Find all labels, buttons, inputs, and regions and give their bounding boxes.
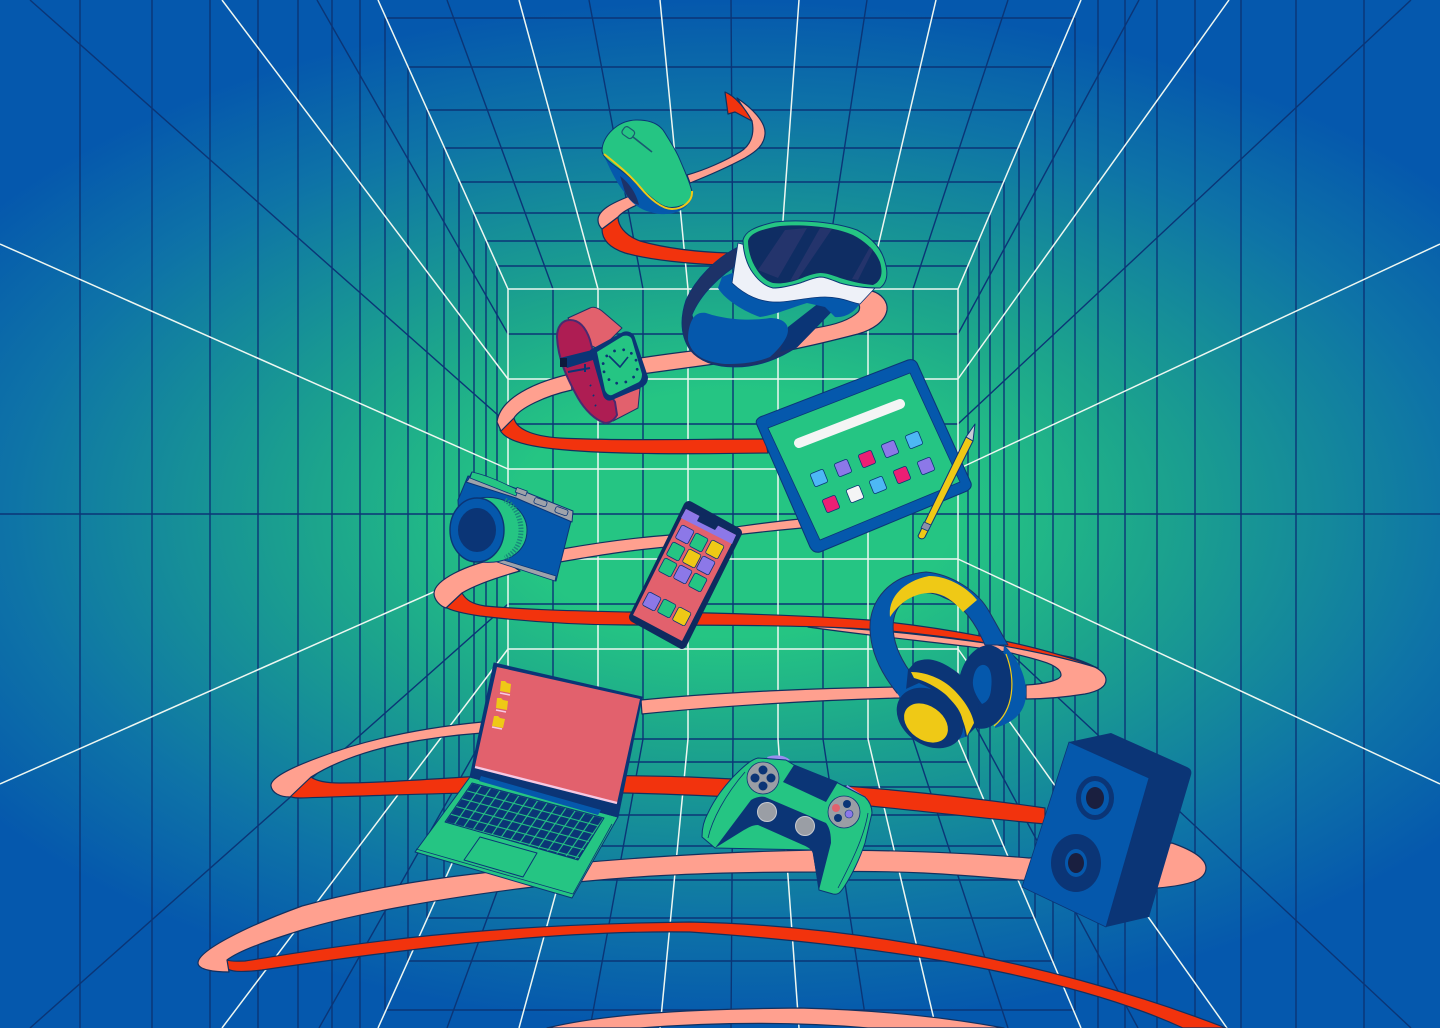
ribbon: bottom salmon band (547, 1008, 1004, 1028)
ribbon: bottom red band (226, 922, 1226, 1028)
icon: tablet (756, 360, 971, 552)
icon: headphones (870, 572, 1026, 761)
ribbon: salmon band behind mouse (598, 196, 637, 229)
ribbon: middle red band (289, 775, 1045, 824)
ribbon: red band behind phone (445, 593, 1098, 668)
ribbon: salmon loop by headphones (808, 626, 1106, 699)
ribbon: salmon band left of phone (560, 535, 670, 562)
ribbon: salmon band right of headset (790, 291, 887, 350)
ribbon: lower salmon band (198, 843, 1206, 972)
ribbon: salmon band right of phone (735, 519, 802, 535)
ribbon: salmon band by watch (497, 374, 572, 431)
ribbon: top salmon tail (687, 98, 765, 183)
spiral ribbon (198, 92, 1226, 1028)
ribbon: red arrow tip (725, 92, 752, 121)
ribbon: red band under mouse (602, 217, 730, 265)
icon: laptop (415, 663, 642, 898)
icon: game controller (702, 755, 872, 894)
ribbon: salmon band right of laptop (641, 687, 900, 714)
icon: smartphone (629, 501, 742, 649)
icon: computer mouse (602, 120, 693, 214)
ribbon: salmon band by camera (434, 558, 520, 608)
ribbon: red band under watch (500, 418, 768, 454)
icon: smartwatch (557, 307, 648, 423)
ribbon: salmon band left of laptop (271, 722, 482, 797)
icon: VR headset (682, 221, 887, 367)
icon: camera (450, 472, 573, 581)
icon: stylus pencil (918, 424, 975, 539)
ribbon: salmon band under headset (640, 349, 715, 374)
icon: speaker (1022, 733, 1191, 927)
